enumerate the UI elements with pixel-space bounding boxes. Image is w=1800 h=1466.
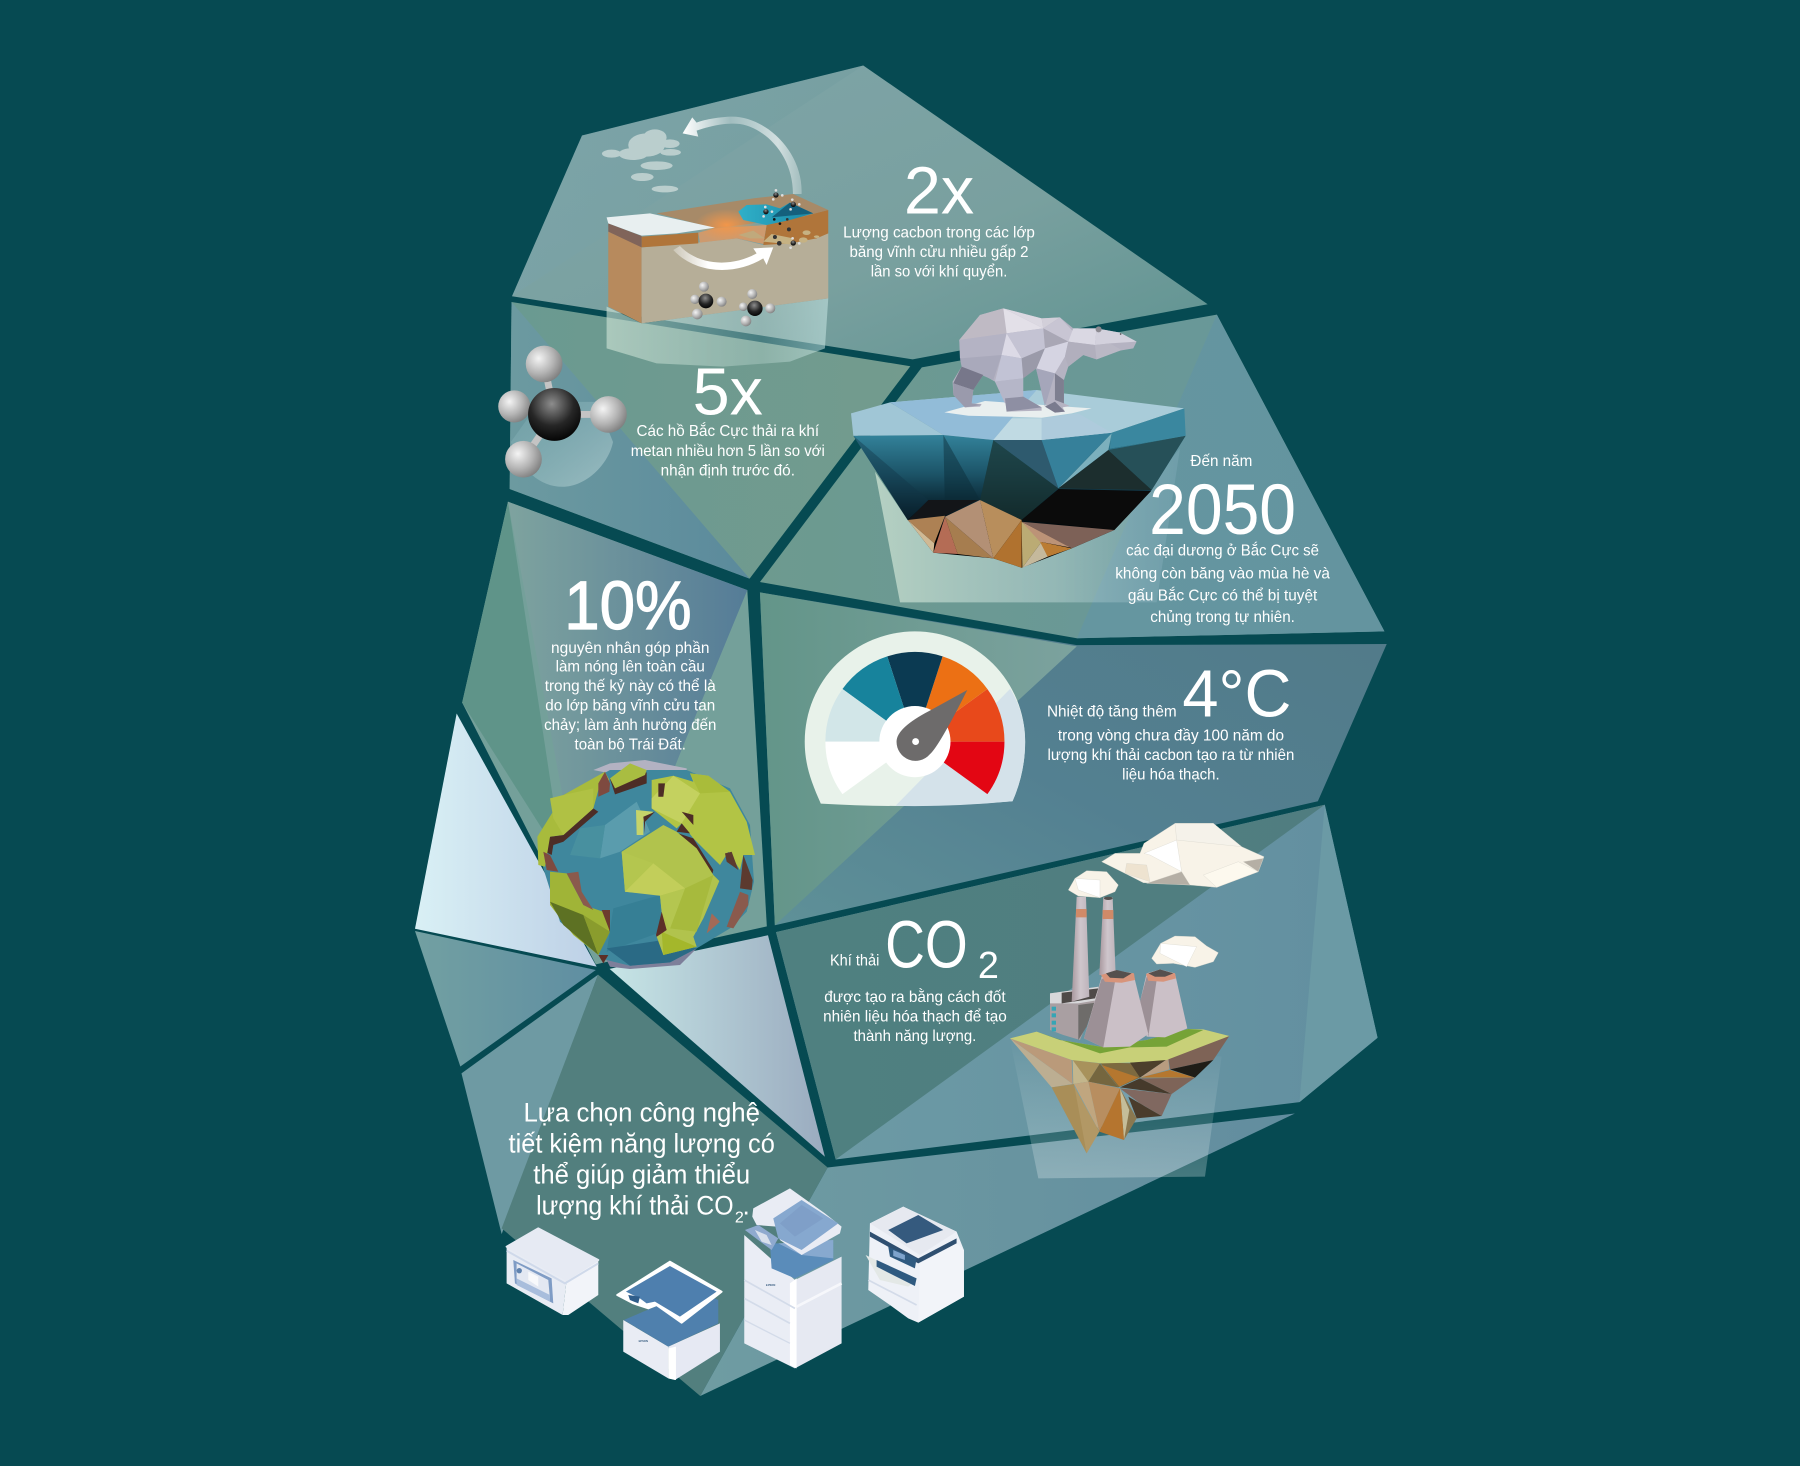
- text: CO2 statistic: thành năng lượng.: [854, 1027, 976, 1045]
- text: 10% statistic: do lớp băng vĩnh cửu tan: [545, 697, 715, 715]
- text: 2050 statistic: các đại dương ở Bắc Cực sẽ: [1126, 541, 1319, 560]
- icon: methane molecules in soil: [690, 189, 801, 326]
- panel: methane lakes facet: [510, 302, 910, 579]
- text: CO2 statistic: Khí thải: [830, 951, 879, 969]
- illustration: tank printer: [507, 1228, 598, 1315]
- text: energy-saving technology message: .: [743, 1191, 750, 1221]
- arrow: lower white circulation arrow: [673, 246, 773, 270]
- text: 4°C statistic: Nhiệt độ tăng thêm: [1047, 702, 1177, 720]
- text: energy-saving technology message: tiết kiệm năng lượng có: [509, 1129, 775, 1159]
- illustration: power plant floating island: [1010, 823, 1264, 1178]
- text: 5x statistic: 5x: [693, 355, 763, 429]
- text: 2x statistic: băng vĩnh cửu nhiều gấp 2: [849, 243, 1029, 261]
- text: 4°C statistic: liệu hóa thạch.: [1122, 765, 1220, 783]
- text: 4°C statistic: trong vòng chưa đầy 100 năm do: [1058, 726, 1284, 744]
- text: 10% statistic: chảy; làm ảnh hưởng đến: [544, 716, 716, 734]
- illustration: permafrost block: [602, 117, 828, 367]
- text: 10% statistic: [544, 567, 716, 754]
- icon: clouds: [602, 129, 681, 192]
- text: 10% statistic: trong thế kỷ này có thể là: [545, 677, 716, 695]
- text: 2050 statistic: 2050: [1149, 471, 1296, 550]
- text: 10% statistic: 10%: [564, 567, 692, 644]
- text: CO2 statistic: CO: [885, 909, 968, 983]
- icon: power plant building: [1050, 987, 1098, 1040]
- text: CO2 statistic: 2: [978, 945, 999, 987]
- illustration: tall office printer: EPSON: [766, 1283, 775, 1287]
- text: CO2 statistic: [823, 909, 1007, 1045]
- illustration: polar bear: [953, 308, 1137, 413]
- text: 5x statistic: [631, 355, 825, 479]
- illustration: methane molecule: [498, 346, 627, 487]
- panel: CO2 facet: [776, 805, 1378, 1159]
- panel: pale left facet: [415, 713, 597, 967]
- text: energy-saving technology message: Lựa chọn công nghệ: [523, 1098, 760, 1128]
- text: 10% statistic: toàn bộ Trái Đất.: [575, 736, 686, 754]
- text: energy-saving technology message: 2: [735, 1209, 744, 1227]
- text: 2050 statistic: không còn băng vào mùa hè và: [1115, 565, 1330, 583]
- text: energy-saving technology message: thể giúp giảm thiểu: [533, 1160, 750, 1190]
- text: 4°C statistic: 4°C: [1182, 657, 1291, 731]
- panel: polar bear facet: [760, 315, 1384, 638]
- icon: chimneys: [1072, 897, 1116, 1002]
- illustration: low-poly globe: [537, 760, 755, 969]
- panel: pale lower facet: [610, 935, 825, 1157]
- text: 5x statistic: Các hồ Bắc Cực thải ra khí: [637, 421, 820, 440]
- text: 2050 statistic: gấu Bắc Cực có thể bị tuyệt: [1128, 585, 1318, 604]
- text: 2x statistic: Lượng cacbon trong các lớp: [843, 224, 1035, 242]
- text: 10% statistic: nguyên nhân góp phần: [551, 639, 709, 657]
- arrow: methane rising to atmosphere: [683, 117, 802, 194]
- text: CO2 statistic: nhiên liệu hóa thạch để tạo: [823, 1008, 1007, 1026]
- text: 2x statistic: lần so với khí quyển.: [871, 263, 1007, 281]
- illustration: compact multifunction printer: [617, 1262, 722, 1380]
- text: energy-saving technology message: [509, 1098, 775, 1227]
- panel: temperature facet: [760, 592, 1387, 925]
- text: 2050 statistic: chủng trong tự nhiên.: [1150, 608, 1295, 626]
- text: 2050 statistic: Đến năm: [1190, 452, 1252, 470]
- panel: top carbon facet: [512, 65, 1208, 359]
- text: 5x statistic: metan nhiều hơn 5 lần so với: [631, 442, 825, 460]
- illustration: ice floe: [851, 390, 1186, 602]
- illustration: tall office printer: [744, 1188, 842, 1368]
- text: energy-saving technology message: lượng khí thải CO: [536, 1191, 734, 1221]
- panel: lower left facet: [415, 931, 596, 1066]
- icon: cooling towers: [1084, 969, 1187, 1047]
- text: 5x statistic: nhận định trước đó.: [661, 461, 795, 479]
- text: CO2 statistic: được tạo ra bằng cách đốt: [824, 987, 1006, 1006]
- text: 4°C statistic: lượng khí thải cacbon tạo ra từ nhiên: [1048, 746, 1294, 764]
- illustration: flagship copier: [866, 1207, 964, 1323]
- panel: background ice facets: [415, 65, 1387, 1396]
- text: 4°C statistic: [1047, 657, 1294, 783]
- illustration: speedometer gauge: [805, 631, 1025, 806]
- panel: global warming facet: [462, 502, 767, 964]
- text: 2050 statistic: [1115, 452, 1330, 626]
- illustration: compact multifunction printer: EPSON: [639, 1339, 648, 1343]
- text: 2x statistic: [843, 155, 1035, 281]
- text: 10% statistic: làm nóng lên toàn cầu: [556, 658, 705, 676]
- panel: bottom technology facets: [461, 975, 1295, 1396]
- text: 2x statistic: 2x: [904, 155, 974, 229]
- icon: smoke clouds: [1068, 823, 1264, 967]
